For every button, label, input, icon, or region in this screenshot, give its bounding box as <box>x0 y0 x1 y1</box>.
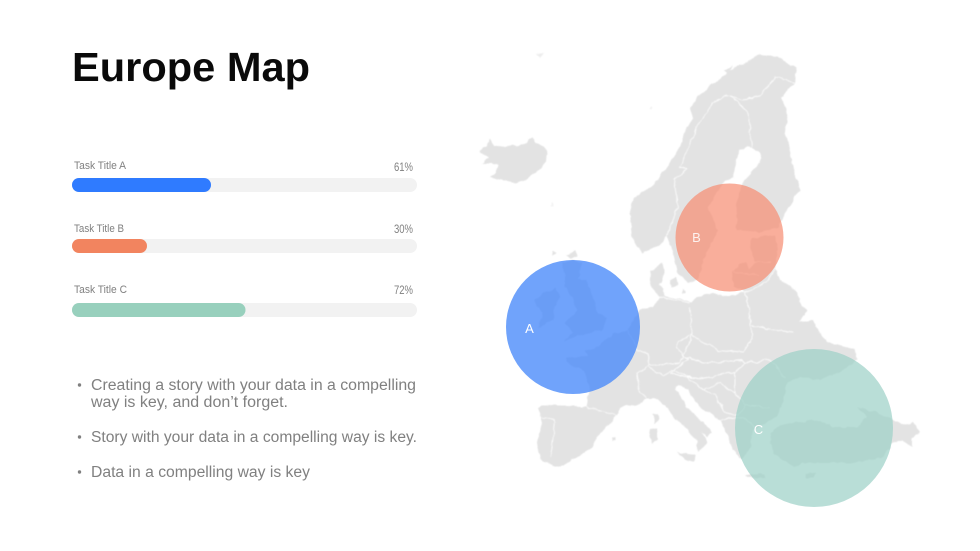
progress row: Task Title B <box>72 223 417 253</box>
progress row: Task Title B: 30% <box>394 224 413 236</box>
land: Iceland <box>480 137 548 183</box>
progress row: Task Title A <box>72 160 417 192</box>
map marker: circle C: C <box>754 422 763 437</box>
land: Turkey and Caucasus <box>770 407 920 467</box>
text block: bullet list: way is key, and don’t forget. <box>90 394 288 411</box>
land: Scandinavia <box>630 55 800 284</box>
map marker: circle A: A <box>525 321 534 336</box>
map marker: circle A <box>506 260 640 394</box>
text block: bullet list: Data in a compelling way is key <box>91 464 310 481</box>
map: Europe <box>480 53 920 478</box>
progress row: Task Title C <box>72 284 417 317</box>
panel: task progress bars <box>72 160 417 317</box>
progress row: Task Title C: Task Title C <box>74 284 127 296</box>
progress row: Task Title C: 72% <box>394 285 413 297</box>
land: Mediterranean and northern islands <box>536 53 815 478</box>
land: Ireland <box>533 288 560 328</box>
progress row: Task Title A: Task Title A <box>74 160 127 172</box>
progress row: Task Title A: 61% <box>394 162 413 174</box>
map marker: circle C <box>735 349 893 507</box>
text block: bullet list <box>78 377 417 481</box>
country borders <box>542 77 795 458</box>
map marker: circle B: B <box>692 230 701 245</box>
text block: bullet list: Story with your data in a compelling way is key. <box>91 429 417 446</box>
land: continental Europe <box>537 235 857 467</box>
progress row: Task Title B: Task Title B <box>74 223 124 235</box>
land: United Kingdom <box>562 260 607 342</box>
title: Europe Map <box>72 44 310 90</box>
map marker: circle B <box>676 184 784 292</box>
text block: bullet list: Creating a story with your data in a compelling <box>91 377 416 394</box>
